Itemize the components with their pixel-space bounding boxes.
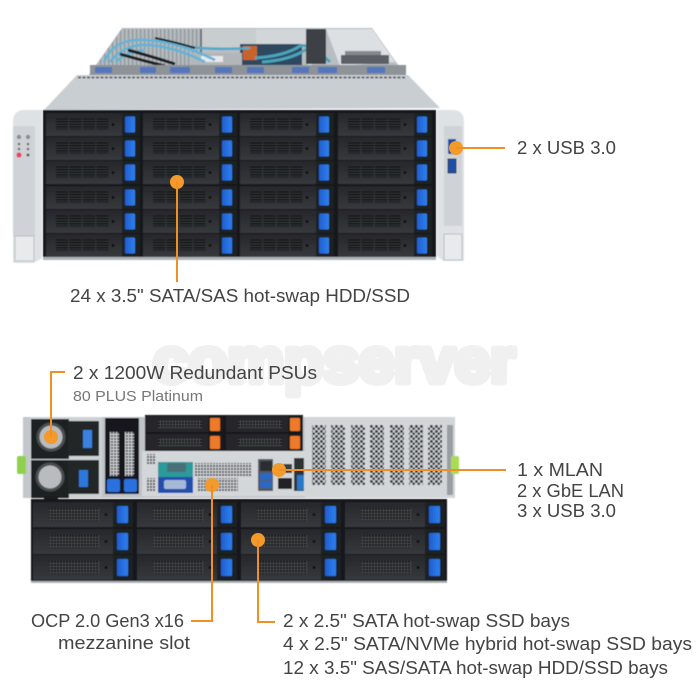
top small drive bays bbox=[145, 415, 303, 452]
callout: OCP slot bbox=[31, 478, 219, 653]
callout: front drives: 24 x 3.5" SATA/SAS hot-swap HDD/SSD bbox=[70, 286, 410, 306]
callout: PSUs: 2 x 1200W Redundant PSUs bbox=[73, 363, 317, 383]
rear server photo bbox=[17, 415, 459, 583]
front server photo bbox=[13, 28, 464, 263]
green handle left bbox=[17, 456, 26, 474]
callout: OCP slot: OCP 2.0 Gen3 x16 bbox=[31, 611, 184, 631]
callout: rear drives: 12 x 3.5" SAS/SATA hot-swap HDD/SSD bays bbox=[283, 658, 668, 678]
callout: rear ports: 3 x USB 3.0 bbox=[517, 501, 616, 521]
rear chassis bbox=[23, 417, 455, 498]
callout: rear drives bbox=[251, 533, 692, 678]
callout: front drives bbox=[70, 175, 410, 306]
PCIe slots bbox=[305, 417, 455, 498]
callout: front USB bbox=[449, 138, 616, 158]
callout: PSUs: 80 PLUS Platinum bbox=[73, 388, 203, 405]
callout: PSUs bbox=[44, 363, 317, 444]
callout: front USB: 2 x USB 3.0 bbox=[517, 138, 616, 158]
callout: OCP slot: mezzanine slot bbox=[58, 633, 190, 653]
callout: rear drives: 4 x 2.5" SATA/NVMe hybrid hot-swap SSD bays bbox=[283, 634, 692, 654]
rear drive cage bbox=[31, 499, 447, 583]
front drive cage bbox=[43, 110, 436, 260]
24 front drive bays bbox=[46, 113, 432, 257]
server lid and interior bbox=[44, 28, 440, 110]
vertical bays bbox=[105, 418, 139, 494]
power supplies bbox=[30, 417, 102, 500]
callout: rear ports: 2 x GbE LAN bbox=[517, 481, 624, 501]
12 rear drive bays bbox=[33, 502, 445, 580]
callout: rear drives: 2 x 2.5" SATA hot-swap SSD bays bbox=[283, 611, 570, 631]
IO panel bbox=[142, 451, 305, 496]
watermark: compserver bbox=[153, 327, 515, 396]
left ear panel bbox=[13, 110, 42, 263]
green handle right bbox=[451, 456, 459, 474]
callout: rear ports: 1 x MLAN bbox=[517, 460, 603, 480]
callout: rear ports bbox=[272, 460, 624, 521]
right ear panel bbox=[437, 110, 464, 261]
